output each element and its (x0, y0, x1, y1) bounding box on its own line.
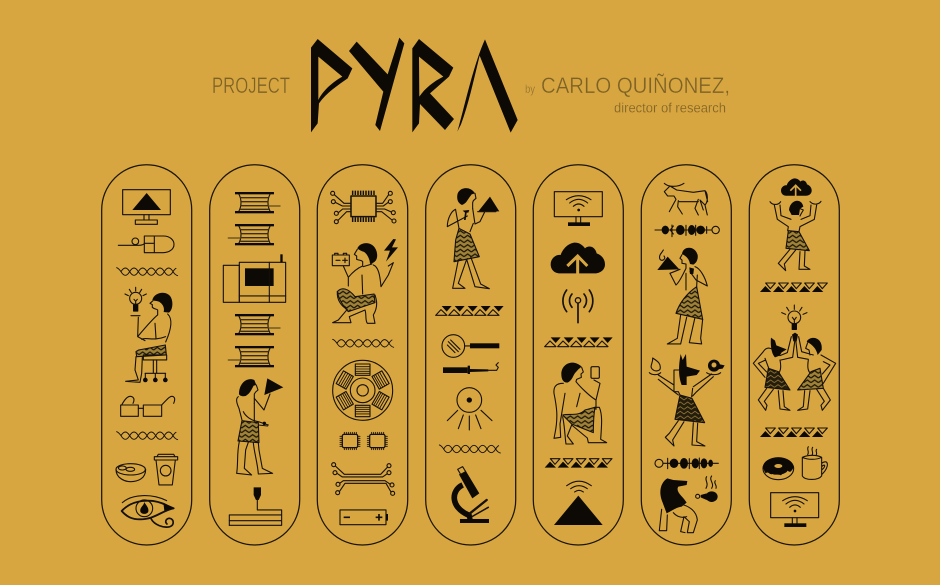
icon: skewer glyph (655, 225, 719, 237)
label: PROJECT: PROJECT (212, 73, 290, 98)
icon: pyramid with wifi (554, 481, 603, 525)
icon: bull (664, 183, 708, 215)
icon: filament spool (235, 314, 280, 335)
panel: column 3 (317, 165, 408, 545)
icon: filament spool (228, 224, 274, 245)
icon: cloud upload (551, 243, 605, 274)
icon: dna helix (117, 268, 178, 276)
icon: filament spool (235, 192, 280, 213)
panel: column 6 (641, 165, 731, 545)
icon: dna helix (117, 432, 178, 440)
panel: column 2 (210, 165, 300, 545)
panel: column 1 (102, 165, 192, 545)
icon: magnifier lens (442, 335, 499, 357)
icon: triangle border (545, 459, 612, 468)
figure: man holding cloud overhead (770, 201, 821, 271)
logotype: PYRA (311, 38, 518, 133)
figure: man with pyramid offering (657, 248, 707, 344)
icon: steaming mug (802, 447, 827, 479)
author role: director of research (614, 100, 726, 116)
panel: column 5 (533, 165, 623, 545)
icon: donut (116, 464, 146, 482)
icon: filament spool (228, 346, 274, 367)
icon: monitor with pyramid (123, 190, 170, 224)
author name: CARLO QUIÑONEZ, (541, 73, 730, 98)
figure: man holding printed triangle (237, 378, 283, 475)
icon: microscope (454, 467, 489, 523)
icon: antenna (563, 290, 593, 323)
panel: column 7 (749, 165, 839, 545)
icon: dna helix (439, 445, 500, 453)
figure: man holding pyramid and hammer (447, 188, 499, 289)
icon: skewer glyph (655, 458, 718, 469)
figure: kneeling man with phone (554, 363, 607, 444)
figure: anubis and man high five (753, 333, 836, 410)
icon: cloud upload (781, 178, 812, 196)
icon: chocolate donut (763, 458, 794, 480)
icon: battery (340, 510, 388, 525)
icon: soldering iron (443, 363, 498, 374)
icon: two small chips (340, 432, 387, 450)
icon: glasses (121, 396, 175, 416)
icon: light source with rays (447, 388, 492, 430)
icon: coffee cup (154, 454, 178, 485)
icon: microchip with traces (331, 191, 396, 224)
figure: anubis with offerings (649, 354, 725, 446)
icon: print head on build plate (229, 487, 282, 525)
icon: motor stator (333, 360, 393, 420)
byline: by (525, 82, 535, 96)
icon: triangle border (760, 428, 827, 437)
figure: jackal (659, 478, 697, 533)
icon: eye of horus (122, 496, 174, 527)
title block (212, 38, 730, 133)
icon: triangle border (436, 306, 504, 315)
icon: dna helix (333, 339, 394, 347)
panel: column 4 (426, 165, 516, 545)
icon: circuit traces (332, 463, 395, 495)
icon: triangle border (760, 283, 827, 292)
icon: wifi monitor (771, 493, 819, 527)
icon: mouse (118, 236, 174, 253)
figure: kneeling man with battery and lightning (332, 239, 398, 323)
icon: drumstick with steam (696, 476, 718, 502)
icon: triangle border (545, 337, 613, 347)
icon: wifi monitor (554, 192, 602, 226)
figure: seated man with light bulb (125, 287, 172, 382)
icon: 3d printer machine (223, 254, 286, 302)
icon: light bulb (782, 305, 807, 330)
